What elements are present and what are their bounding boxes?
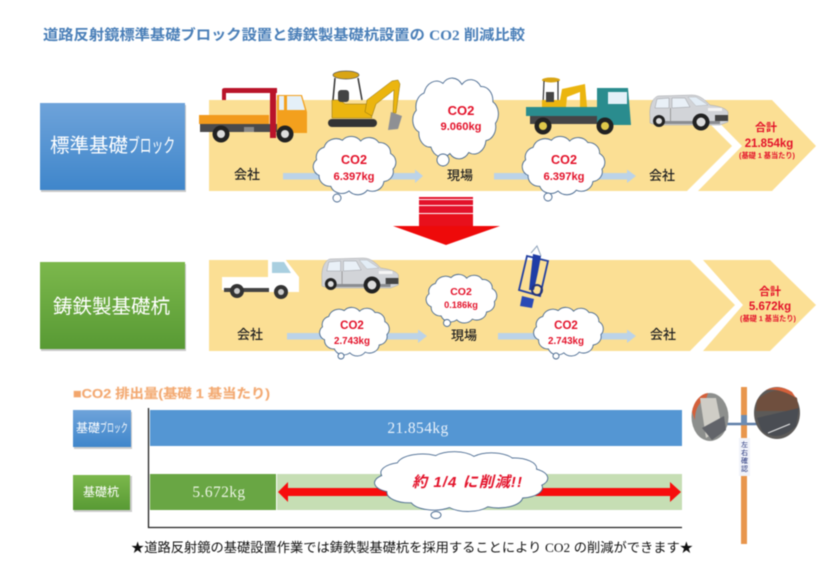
total chevron: block: [697, 100, 816, 191]
bar: foundation pile 5.672kg: 5.672kg: [192, 484, 246, 501]
icon: car: [322, 258, 398, 294]
heading box: standard block: ブロック: [128, 134, 175, 157]
cloud: transport 2.743kg outbound: 2.743kg: [334, 336, 370, 347]
total chevron: pile: 合計: [759, 284, 781, 298]
cloud: on-site 0.186kg: 0.186kg: [444, 300, 478, 310]
label: company: 会社: [650, 327, 676, 342]
heading box: cast iron pile: [40, 262, 186, 351]
total chevron: pile: (基礎 1 基当たり): [740, 314, 797, 323]
cloud: transport 6.397kg outbound: 6.397kg: [333, 171, 375, 183]
icon: road mirror: 左: [741, 440, 748, 449]
title: 道路反射鏡標準基礎ブロック設置と鋳鉄製基礎杭設置の CO2 削減比較: [43, 26, 526, 44]
cloud: on-site 0.186kg: [426, 274, 497, 326]
footer message: ★道路反射鏡の基礎設置作業では鋳鉄製基礎杭を採用することにより CO2 の削減ができます★: [131, 540, 693, 555]
row label: foundation pile: [73, 475, 132, 512]
bar: foundation block 21.854kg: [150, 410, 682, 446]
process band: block: [209, 100, 732, 191]
process band: pile: [209, 260, 735, 351]
total chevron: pile: 5.672kg: [749, 301, 791, 313]
icon: road mirror: 認: [741, 465, 748, 473]
row label: foundation block: 基礎: [76, 421, 100, 435]
arrow: red down arrow: [393, 197, 500, 245]
bar: foundation pile 5.672kg: [150, 474, 276, 510]
chart: CO2 emissions comparison: [73, 386, 682, 528]
panel: standard foundation block process: [40, 71, 816, 202]
icon: pile driver: [519, 246, 548, 308]
heading box: cast iron pile: 鋳鉄製基礎杭: [53, 296, 171, 318]
label: company: 会社: [649, 168, 675, 183]
total chevron: pile: [703, 260, 816, 351]
icon: road mirror: [692, 387, 800, 544]
label: site: 現場: [447, 168, 473, 183]
cloud: transport 2.743kg outbound: [287, 307, 427, 359]
icon: road mirror: 確: [741, 456, 748, 465]
panel: cast iron foundation pile process: [40, 246, 816, 359]
chart title: ■CO2 排出量(基礎 1 基当たり): [73, 386, 270, 401]
cloud: transport 6.397kg return: [494, 136, 636, 201]
icon: teal flatbed truck with excavator: [526, 78, 631, 134]
icon: excavator: [328, 71, 402, 130]
label: company: 会社: [234, 167, 260, 182]
cloud: transport 6.397kg outbound: CO2: [341, 153, 367, 167]
chart axes: [148, 408, 682, 528]
cloud: on-site 9.060kg: 9.060kg: [440, 121, 482, 133]
cloud: transport 6.397kg return: 6.397kg: [543, 171, 585, 183]
bar: foundation block 21.854kg: 21.854kg: [387, 420, 449, 437]
cloud: on-site 0.186kg: CO2: [450, 286, 472, 298]
cloud: transport 2.743kg return: CO2: [554, 320, 578, 332]
row label: foundation block: ブロック: [100, 420, 128, 436]
cloud: transport 6.397kg return: CO2: [551, 153, 577, 167]
cloud: transport 2.743kg return: [498, 307, 636, 359]
bar: foundation pile reduction background: [277, 474, 682, 510]
heading box: standard block: 標準基礎: [50, 135, 128, 157]
cloud: transport 2.743kg outbound: CO2: [340, 320, 364, 332]
callout: about one quarter reduction: [375, 452, 548, 518]
cloud: on-site 9.060kg: [413, 78, 498, 166]
arrow: red double-headed reduction arrow: [278, 482, 681, 502]
icon: road mirror: 右: [741, 448, 748, 457]
icon: small white truck: [222, 259, 299, 299]
cloud: transport 6.397kg outbound: [283, 136, 423, 202]
label: site: 現場: [451, 328, 477, 343]
total chevron: block: 合計: [755, 120, 777, 134]
total chevron: block: (基礎 1 基当たり): [739, 151, 796, 160]
row label: foundation block: [73, 410, 132, 449]
label: company: 会社: [237, 327, 263, 342]
cloud: transport 2.743kg return: 2.743kg: [548, 336, 584, 347]
icon: crane truck: [199, 88, 307, 142]
total chevron: block: 21.854kg: [745, 138, 793, 150]
cloud: on-site 9.060kg: CO2: [448, 103, 474, 118]
row label: foundation pile: 基礎杭: [83, 485, 119, 499]
heading box: standard block: [40, 103, 186, 192]
icon: car: [650, 95, 728, 130]
callout: about one quarter reduction: 約 1/4 に削減!!: [412, 474, 522, 491]
